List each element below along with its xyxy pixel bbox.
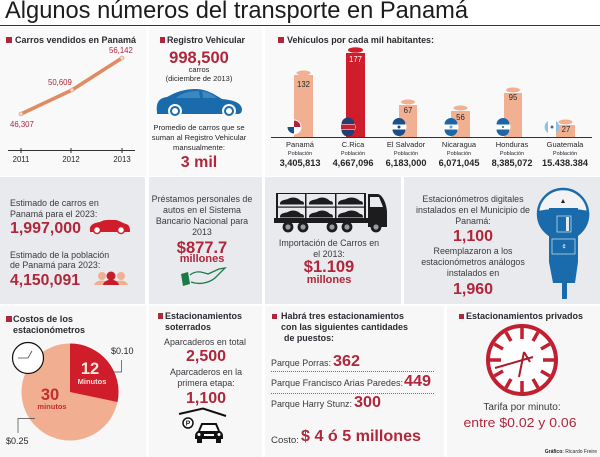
panel: vehículos por cada mil habitantes: Población bbox=[553, 151, 577, 157]
icon: flag Honduras bbox=[496, 118, 510, 136]
panel: registro vehicular: mansualmente: bbox=[173, 143, 225, 152]
pie chart: 12 bbox=[81, 360, 99, 378]
panel: importación de carros: $1.109 bbox=[304, 258, 354, 276]
panel: estimados 2023: 4,150,091 bbox=[10, 272, 80, 289]
icon: parking meter: ¢ bbox=[562, 244, 566, 250]
panel: préstamos personales: $877.7 bbox=[177, 239, 227, 257]
bar chart: 177 bbox=[349, 55, 362, 64]
panel: estacionamientos soterrados: 1,100 bbox=[186, 390, 226, 407]
icon: flag Nicaragua bbox=[444, 118, 458, 136]
panel: vehículos por cada mil habitantes: 4,667,096 bbox=[333, 158, 373, 168]
panel: registro vehicular: 998,500 bbox=[169, 49, 229, 67]
icon: hand with bill bbox=[181, 268, 225, 286]
pie chart: minutos bbox=[37, 402, 67, 411]
panel: estacionómetros digitales: estacionómetros análogos bbox=[421, 257, 525, 267]
callout: $0.25 bbox=[6, 418, 35, 446]
credit: Gráfico: Ricardo Freire bbox=[545, 449, 597, 455]
panel: tres estacionamientos: de puestos: bbox=[284, 333, 334, 343]
panel: estacionómetros digitales: Estacionómetros digitales bbox=[422, 194, 524, 204]
panel: tres estacionamientos bbox=[265, 306, 444, 457]
panel: tres estacionamientos: 362 bbox=[333, 353, 360, 370]
icon: flag El Salvador bbox=[392, 118, 406, 136]
panel: importación de carros: Importación de Carros en bbox=[279, 238, 379, 248]
panel: importación de carros bbox=[265, 177, 401, 304]
panel: vehículos por cada mil habitantes: Población bbox=[447, 151, 471, 157]
panel: préstamos personales bbox=[149, 177, 262, 304]
panel: estacionamientos soterrados: Aparcaderos en total bbox=[164, 337, 246, 347]
line chart: 50,609 bbox=[48, 78, 72, 87]
panel: estacionamientos privados: Tarifa por minuto: bbox=[483, 402, 561, 413]
panel: vehículos por cada mil habitantes: 15.438.384 bbox=[542, 158, 589, 168]
line chart: 46,307 bbox=[10, 120, 34, 129]
panel: tres estacionamientos: Costo: bbox=[271, 434, 299, 445]
pie chart: 30 bbox=[41, 386, 59, 404]
panel: estacionamientos soterrados: primera etapa: bbox=[177, 378, 235, 388]
pie chart: Minutos bbox=[78, 377, 106, 386]
panel: estacionamientos soterrados bbox=[149, 306, 262, 457]
bar chart: 67 bbox=[404, 106, 412, 115]
panel: estimados 2023: Estimado de la población bbox=[10, 250, 109, 260]
panel: tres estacionamientos: 300 bbox=[354, 394, 381, 411]
panel: estacionómetros digitales: Panamá: bbox=[455, 216, 491, 226]
icon: red car bbox=[90, 220, 130, 234]
panel: estacionamientos privados bbox=[447, 306, 600, 457]
bar chart: 27 bbox=[562, 125, 570, 134]
icon: car carrier truck bbox=[274, 193, 387, 231]
icon: parking meter bbox=[538, 189, 589, 299]
panel: vehículos por cada mil habitantes bbox=[265, 27, 600, 176]
panel: préstamos personales: Préstamos personales de bbox=[152, 194, 252, 204]
bar chart bbox=[271, 47, 592, 138]
panel: vehículos por cada mil habitantes: Panamá bbox=[286, 140, 315, 149]
panel: tres estacionamientos: Parque Harry Stunz: bbox=[271, 398, 352, 409]
panel: tres estacionamientos: Habrá tres estacionamientos bbox=[281, 311, 404, 321]
panel: tres estacionamientos: $ 4 ó 5 millones bbox=[301, 428, 421, 445]
icon: people bbox=[94, 272, 128, 285]
panel: estimados 2023: Panamá para el 2023: bbox=[10, 209, 97, 219]
panel: registro vehicular: Registro Vehicular bbox=[167, 35, 245, 45]
panel: importación de carros: millones bbox=[307, 274, 351, 286]
panel: estacionómetros digitales: instalados en bbox=[447, 268, 499, 278]
panel: estacionómetros digitales: Reemplazaron a los bbox=[434, 246, 513, 256]
callout: $0.10: $0.10 bbox=[111, 346, 134, 356]
panel: vehículos por cada mil habitantes: Nicaragua bbox=[442, 140, 477, 149]
panel: registro vehicular bbox=[149, 27, 262, 176]
panel: registro vehicular: suman al Registro Vehicular bbox=[152, 133, 247, 142]
panel: estimados 2023: 1,997,000 bbox=[10, 220, 81, 237]
panel: estacionamientos privados: Estacionamientos privados bbox=[466, 311, 583, 321]
panel: vehículos por cada mil habitantes: 6,071,045 bbox=[439, 158, 479, 168]
panel: tres estacionamientos: con las siguientes cantidades bbox=[281, 322, 408, 332]
panel: vehículos por cada mil habitantes: Población bbox=[394, 151, 418, 157]
callout: $0.10 bbox=[111, 346, 134, 372]
panel: estacionamientos soterrados: Estacionamientos bbox=[165, 311, 242, 321]
panel: estacionamientos soterrados: 2,500 bbox=[186, 348, 226, 365]
panel: vehículos por cada mil habitantes: Población bbox=[500, 151, 524, 157]
panel: vehículos por cada mil habitantes: 6,183,000 bbox=[386, 158, 426, 168]
panel: registro vehicular: Promedio de carros que se bbox=[153, 123, 245, 132]
panel: vehículos por cada mil habitantes: 8,385,072 bbox=[492, 158, 532, 168]
panel: registro vehicular: 3 mil bbox=[181, 154, 217, 171]
panel: registro vehicular: (diciembre de 2013) bbox=[166, 74, 233, 83]
icon: flag Guatemala bbox=[545, 120, 559, 134]
panel: costos de los estacionómetros bbox=[0, 306, 146, 457]
line chart bbox=[8, 46, 135, 164]
panel: estacionómetros digitales: instalados en el Municipio de bbox=[416, 205, 530, 215]
line chart: 2011 bbox=[13, 155, 29, 164]
panel: costos de los estacionómetros: Costos de los bbox=[13, 314, 73, 324]
panel: tres estacionamientos: Parque Francisco Arias Paredes: bbox=[271, 377, 403, 388]
panel: estacionómetros digitales: 1,100 bbox=[453, 228, 493, 245]
panel: préstamos personales: millones bbox=[180, 253, 224, 265]
icon: flag Panamá bbox=[286, 120, 302, 134]
panel: estacionómetros digitales: 1,960 bbox=[453, 281, 493, 298]
panel: estacionómetros digitales bbox=[404, 177, 600, 304]
icon: covered parking: P bbox=[186, 420, 191, 428]
panel: estacionamientos soterrados: soterrados bbox=[165, 322, 211, 332]
icon: clock bbox=[12, 342, 44, 374]
panel: vehículos por cada mil habitantes: Vehículos por cada mil habitantes: bbox=[287, 35, 434, 45]
panel: vehículos por cada mil habitantes: C.Rica bbox=[342, 140, 365, 149]
icon: blue car bbox=[157, 89, 242, 118]
bar chart: 132 bbox=[297, 80, 310, 89]
panel: estimados 2023: Estimado de carros en bbox=[10, 198, 99, 208]
panel: vehículos por cada mil habitantes: Honduras bbox=[496, 140, 529, 149]
panel: estimados 2023: de Panamá para 2023: bbox=[10, 260, 100, 270]
line chart: 56,142 bbox=[109, 46, 133, 55]
panel: préstamos personales: 2013 bbox=[192, 227, 212, 237]
panel: costos de los estacionómetros: estacionómetros bbox=[13, 325, 85, 335]
pie chart bbox=[22, 344, 119, 440]
panel: préstamos personales: autos en el Sistema bbox=[163, 205, 241, 215]
panel: tres estacionamientos: 449 bbox=[404, 373, 431, 390]
panel: vehículos por cada mil habitantes: Población bbox=[288, 151, 312, 157]
callout: $0.25: $0.25 bbox=[6, 436, 29, 446]
panel: vehículos por cada mil habitantes: Población bbox=[341, 151, 365, 157]
panel: estimados 2023 bbox=[0, 177, 145, 304]
panel: estacionamientos privados: entre $0.02 y 0.06 bbox=[464, 415, 576, 430]
panel: vehículos por cada mil habitantes: El Salvador bbox=[387, 140, 426, 149]
panel: carros vendidos bbox=[0, 27, 146, 176]
icon: flag Costa Rica bbox=[340, 118, 356, 136]
panel: vehículos por cada mil habitantes: Guatemala bbox=[547, 140, 584, 149]
panel: carros vendidos: Carros vendidos en Panamá bbox=[15, 35, 137, 45]
line chart: 2013 bbox=[113, 155, 131, 164]
bar chart: 95 bbox=[509, 93, 518, 102]
panel: vehículos por cada mil habitantes: 3,405,813 bbox=[280, 158, 320, 168]
line chart: 2012 bbox=[62, 155, 80, 164]
panel: tres estacionamientos: Parque Porras: bbox=[271, 357, 331, 368]
panel: préstamos personales: Bancario Nacional para bbox=[156, 216, 248, 226]
panel: registro vehicular: carros bbox=[189, 65, 210, 74]
panel: estacionamientos soterrados: Aparcaderos en la bbox=[170, 367, 242, 377]
bar chart: 56 bbox=[456, 113, 465, 122]
icon: red clock bbox=[488, 326, 556, 394]
icon: covered parking bbox=[179, 408, 226, 443]
panel: importación de carros: el 2013: bbox=[313, 249, 345, 259]
